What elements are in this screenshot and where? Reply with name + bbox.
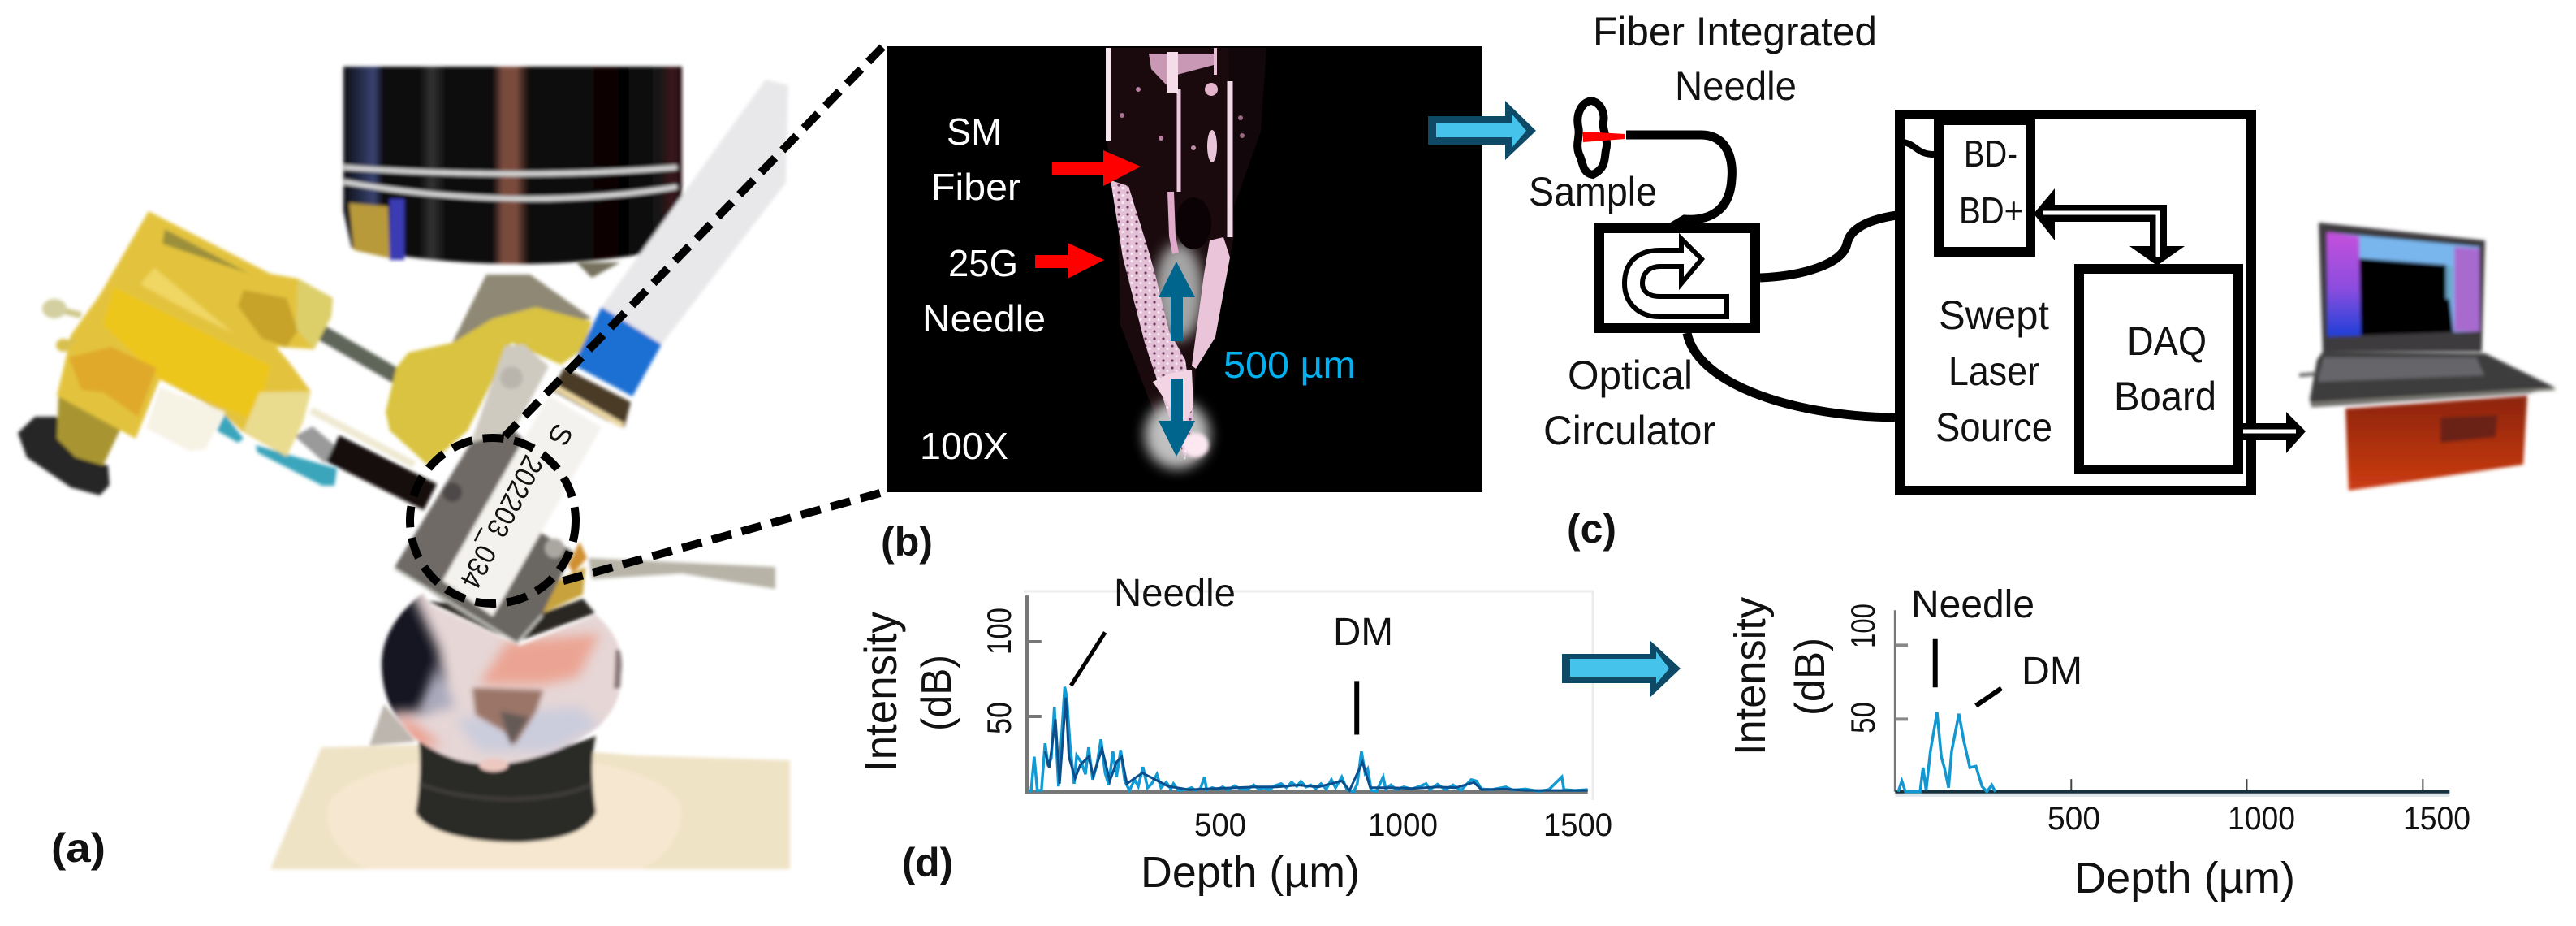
- label text on plate: 202203_034: [454, 450, 550, 594]
- detector link: [1904, 142, 1934, 154]
- chart labels: 100: [1844, 604, 1882, 648]
- schematic labels: Board: [2114, 374, 2216, 419]
- metal plate and label: [395, 344, 602, 643]
- black rod and coupler: [295, 410, 430, 497]
- schematic labels: Swept: [1939, 292, 2049, 338]
- optical circulator box: [1599, 228, 1755, 328]
- chart labels: DM: [2022, 650, 2082, 693]
- arrow: panel b to c: [1428, 101, 1536, 160]
- panel label (a): (a): [51, 825, 106, 871]
- panel (c): system schematic: [1529, 9, 2555, 491]
- schematic labels: Fiber Integrated: [1593, 9, 1877, 54]
- chart labels: 500: [1194, 807, 1246, 843]
- eye globe: [369, 589, 625, 772]
- arrow: DAQ to laptop: [2243, 412, 2306, 453]
- A-scan trace: [1898, 712, 1996, 792]
- chart labels: 500: [2047, 801, 2100, 837]
- ribbon cable: [551, 80, 788, 427]
- tube: [568, 542, 775, 589]
- fiber: circulator to laser: [1687, 333, 1895, 418]
- schematic labels: Optical: [1568, 353, 1693, 398]
- objective cylinder: [343, 67, 682, 264]
- yellow printed mount, right: [386, 307, 592, 465]
- panel label (c): (c): [1567, 506, 1616, 552]
- teal arrow up: [1159, 262, 1195, 341]
- label text on plate: [454, 418, 580, 594]
- panel label (d): (d): [902, 840, 953, 885]
- axes: [1027, 595, 1588, 792]
- A-scan trace dark: [1045, 698, 1588, 790]
- schematic labels: DAQ: [2127, 318, 2207, 364]
- black eye holder: [416, 736, 596, 842]
- callout line: DM: [1354, 681, 1359, 735]
- base block and disc: [270, 704, 790, 869]
- micrograph labels: Needle: [922, 297, 1046, 340]
- yellow printed mount, left: [18, 211, 333, 495]
- fiber to circulator: [1626, 135, 1732, 227]
- teal arrow down: [1159, 379, 1195, 457]
- chart labels: 100: [980, 608, 1018, 655]
- callout line: DM: [1976, 688, 2001, 706]
- fiber: circulator to detector: [1760, 213, 1935, 278]
- needle image: [1107, 48, 1266, 469]
- panel (d): A-scan chart before: [855, 572, 1612, 897]
- micrograph labels: [920, 110, 1356, 467]
- chart labels: 1500: [1543, 807, 1612, 843]
- zoom lines to panel b: [505, 47, 882, 582]
- balanced detector box: [1939, 120, 2030, 252]
- gray rod: [322, 333, 398, 377]
- callout line: needle: [1933, 639, 1938, 687]
- red arrow: 25G needle: [1035, 243, 1104, 279]
- panel (a): photograph of needle setup on eye: [18, 67, 790, 869]
- upper bracket: [452, 262, 620, 343]
- zoom circle: [410, 438, 576, 604]
- swept laser source box: [1900, 115, 2251, 491]
- schematic labels: Source: [1935, 405, 2052, 450]
- panel (d): A-scan chart after: [1726, 583, 2470, 902]
- arrow: before to after chart: [1562, 640, 1681, 698]
- axes: [1895, 610, 2449, 794]
- chart labels: 1500: [2403, 801, 2470, 837]
- schematic labels: [1529, 9, 2216, 453]
- chart labels: Intensity: [855, 612, 906, 772]
- panel label (b): (b): [881, 519, 933, 565]
- callout line: needle: [1071, 632, 1105, 686]
- chart labels: Depth (µm): [1141, 848, 1360, 897]
- A-scan trace: [1029, 687, 1588, 792]
- chart labels: (dB): [913, 655, 960, 731]
- chart labels: Intensity: [1726, 597, 1775, 755]
- laptop: [2299, 223, 2555, 491]
- chart labels: 50: [1844, 702, 1882, 733]
- double arrow: detector and DAQ: [2034, 188, 2185, 266]
- chart labels: 1000: [1368, 807, 1438, 843]
- chart labels: [855, 572, 1612, 897]
- micrograph labels: SM: [947, 110, 1002, 153]
- chart labels: 1000: [2228, 801, 2295, 837]
- schematic labels: Needle: [1675, 63, 1797, 109]
- schematic labels: Circulator: [1543, 408, 1715, 453]
- chart labels: 50: [980, 702, 1018, 734]
- micrograph labels: 25G: [948, 242, 1018, 284]
- schematic labels: BD-: [1964, 132, 2017, 175]
- chart labels: (dB): [1787, 638, 1834, 716]
- micrograph labels: Fiber: [931, 166, 1020, 208]
- red arrow: SM fiber: [1052, 150, 1141, 186]
- chart labels: Depth (µm): [2074, 854, 2295, 902]
- label text on plate: S: [542, 418, 580, 452]
- teal tabs: [217, 414, 337, 486]
- panel (b): needle micrograph: [887, 46, 1482, 492]
- chart labels: Needle: [1114, 572, 1236, 615]
- schematic labels: Laser: [1948, 348, 2039, 394]
- chart labels: Needle: [1911, 583, 2034, 626]
- DAQ board box: [2079, 269, 2238, 469]
- schematic labels: Sample: [1529, 169, 1657, 214]
- micrograph labels: 100X: [920, 425, 1008, 467]
- schematic labels: BD+: [1959, 189, 2023, 232]
- chart labels: [1726, 583, 2470, 902]
- sample: [1577, 101, 1625, 175]
- chart labels: DM: [1333, 611, 1393, 654]
- micrograph labels: 500 µm: [1223, 344, 1356, 386]
